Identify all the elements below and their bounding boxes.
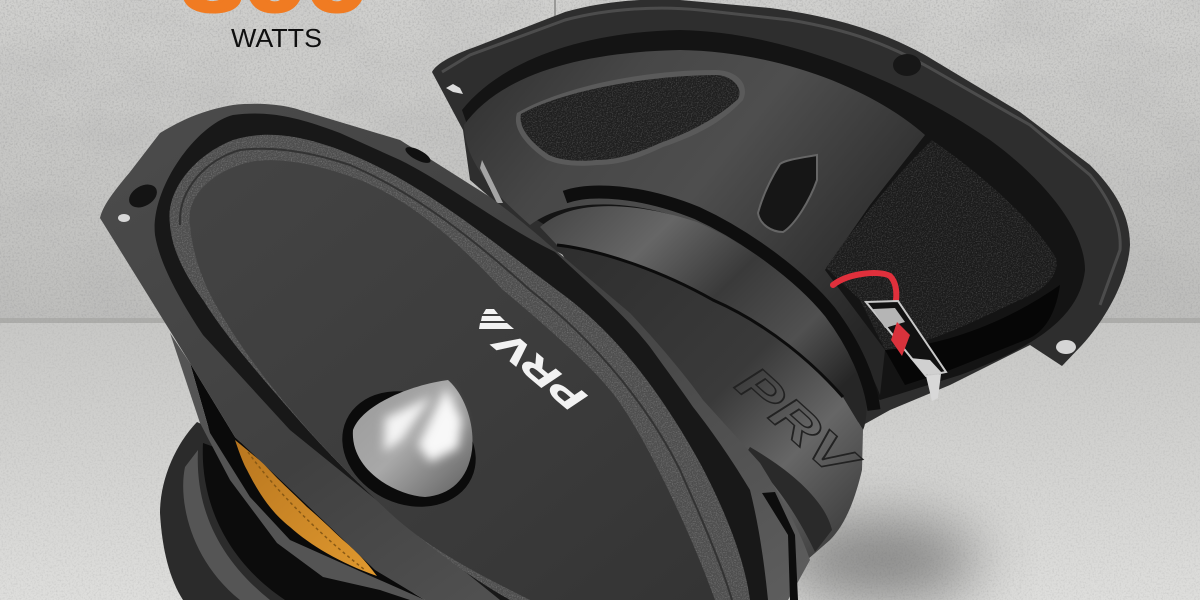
front speaker: black gap behind frame (190, 363, 425, 600)
rear speaker: top vent mesh (516, 70, 745, 166)
front speaker: lower frame lip (170, 333, 425, 600)
front speaker: magnet stack (160, 422, 420, 600)
front speaker: top edge notch (403, 144, 433, 166)
front speaker: dust cap ring (323, 370, 495, 528)
rear speaker: basket channel (565, 192, 874, 410)
front speaker: paper cone (189, 160, 715, 600)
front speaker: corner hole small (118, 214, 130, 222)
rear speaker: vertical slot near corner (480, 160, 503, 203)
rear speaker: terminal wire (833, 273, 896, 300)
front speaker: surround roll line (180, 149, 732, 600)
front speaker: orange kevlar cone back (235, 440, 377, 576)
front speaker: silver bullet phase plug (353, 380, 473, 497)
rear speaker: basket body (464, 50, 925, 395)
rear speaker: small centre vent (758, 155, 817, 232)
logo: PRV lettering: PRV (485, 320, 593, 419)
rear speaker: lower black opening (885, 285, 1060, 385)
rear speaker: mounting frame (432, 0, 1130, 425)
background: concrete floor (0, 323, 1200, 600)
rear speaker (432, 0, 1130, 560)
logo: chevron stripes (479, 309, 514, 329)
rear speaker: mounting hole corner top-left (446, 84, 463, 94)
front speaker: foam surround (169, 135, 750, 600)
rear speaker: mounting hole top-right (893, 54, 921, 76)
rear speaker: mounting hole bottom-right (1056, 340, 1076, 354)
front speaker: corner hole large (125, 180, 161, 212)
front speaker: PRV logo (479, 309, 593, 419)
floor shadow under speakers (780, 518, 980, 600)
rear speaker: terminal block (866, 301, 946, 401)
power rating label: WATTS: WATTS (231, 25, 322, 53)
front speaker: black inner band (155, 114, 768, 600)
front speaker (100, 104, 810, 600)
background: concrete wall (0, 0, 1200, 323)
front speaker: tab slot (762, 492, 798, 600)
rear speaker: basket ring (540, 206, 867, 430)
front speaker: mounting frame (100, 104, 810, 600)
rear speaker: side vent mesh (826, 140, 1057, 350)
rear speaker: ring lower groove (557, 245, 843, 397)
rear speaker: magnet and motor (557, 245, 869, 560)
embossed PRV logo on magnet: PRV (726, 356, 869, 493)
rear speaker: inner dark lip (462, 30, 1085, 400)
